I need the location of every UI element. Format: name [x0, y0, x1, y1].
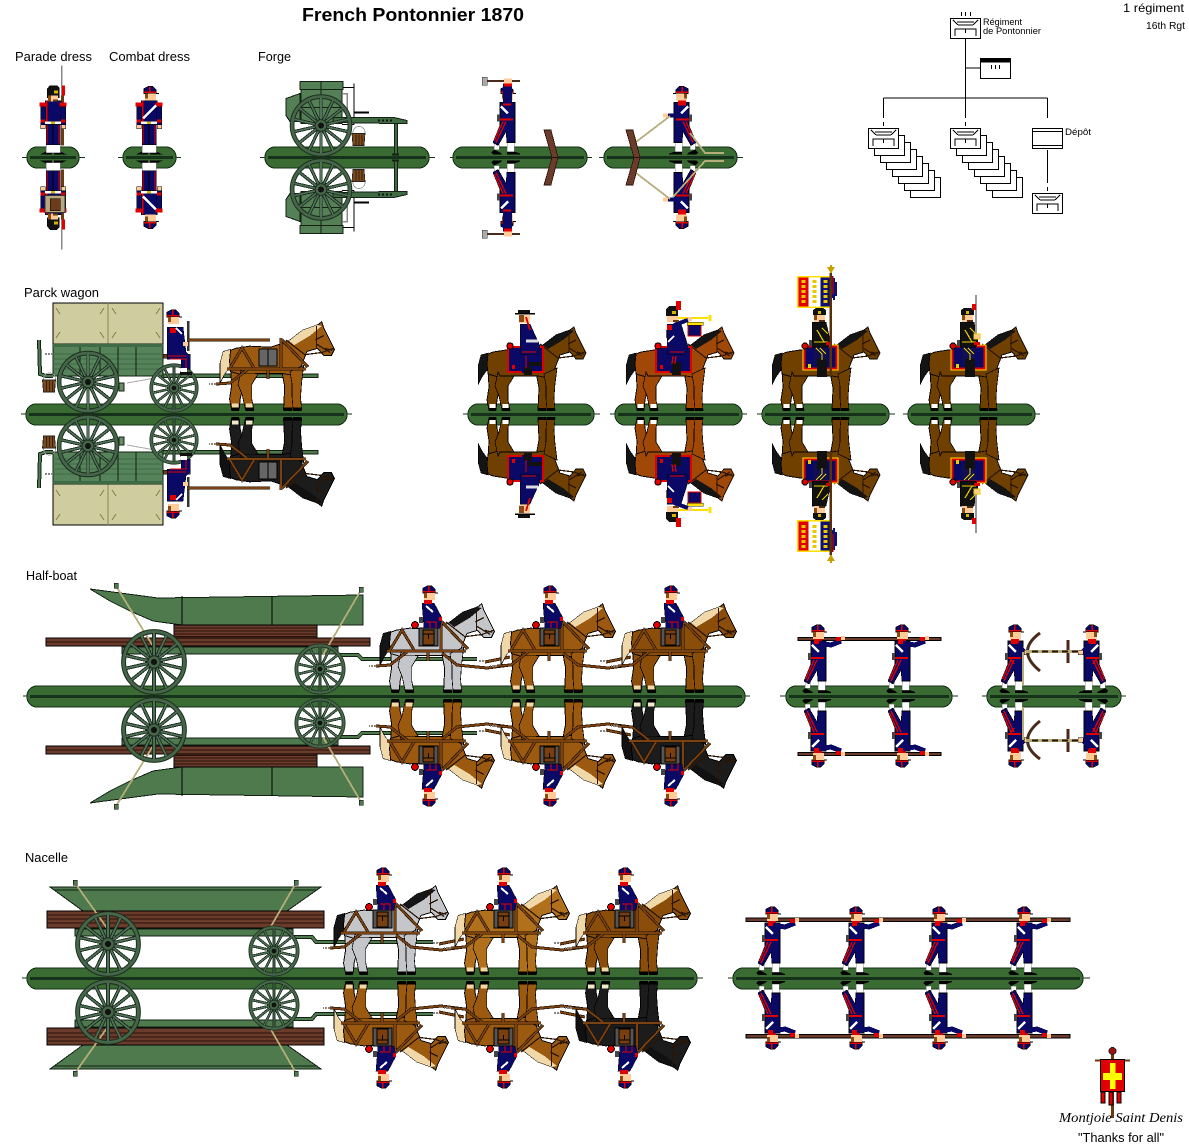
row 1 bases	[22, 147, 743, 168]
row 2 bases	[21, 404, 1040, 425]
organisation chart	[868, 12, 1091, 214]
regiment symbol	[950, 18, 980, 38]
title: French Pontonnier 1870	[302, 4, 524, 25]
company stack one	[868, 128, 940, 198]
row 1 labels: Forge	[258, 50, 291, 64]
regiment number: 16th Rgt	[1146, 20, 1185, 32]
mounted trumpeter	[626, 301, 734, 527]
half-boat wagon and team	[46, 583, 736, 809]
soldiers carrying anchor	[999, 625, 1108, 767]
mounted sabre rider	[920, 295, 1028, 533]
half-boat label: Half-boat	[26, 569, 78, 583]
row 1 labels	[15, 50, 291, 64]
row 4 bases	[22, 968, 1090, 989]
nacelle label: Nacelle	[25, 851, 68, 865]
row 3 bases	[23, 686, 1126, 707]
row 1 labels: Combat dress	[109, 50, 190, 64]
row 1 labels: Parade dress	[15, 50, 92, 64]
nacelle wagon and team	[47, 868, 690, 1088]
thanks note: "Thanks for all"	[1078, 1131, 1164, 1145]
headquarters box	[980, 58, 1011, 78]
soldier with rope	[636, 86, 724, 228]
regiment count: 1 régiment	[1123, 1, 1185, 15]
soldiers carrying pole	[798, 625, 941, 767]
pontonnier label: de Pontonnier	[983, 26, 1041, 37]
timber prop two	[626, 130, 640, 185]
regiment label: Régiment	[983, 17, 1022, 28]
parck wagon team	[39, 303, 334, 525]
soldier with hammer	[482, 77, 520, 238]
depot label: Dépôt	[1065, 127, 1091, 138]
timber prop one	[544, 130, 558, 185]
banner emblem	[1095, 1048, 1130, 1118]
mounted officer	[478, 310, 586, 518]
parck wagon label: Parck wagon	[24, 286, 99, 300]
mounted standard bearer	[772, 265, 880, 563]
parade dress soldier	[40, 66, 67, 250]
company stack two	[950, 128, 1022, 198]
motto: Montjoie Saint Denis	[1058, 1111, 1184, 1126]
depot box	[1032, 128, 1062, 148]
soldiers carrying long poles	[746, 907, 1070, 1049]
forge wagon	[286, 82, 407, 234]
depot company	[1032, 194, 1062, 214]
combat dress soldier	[136, 86, 163, 228]
